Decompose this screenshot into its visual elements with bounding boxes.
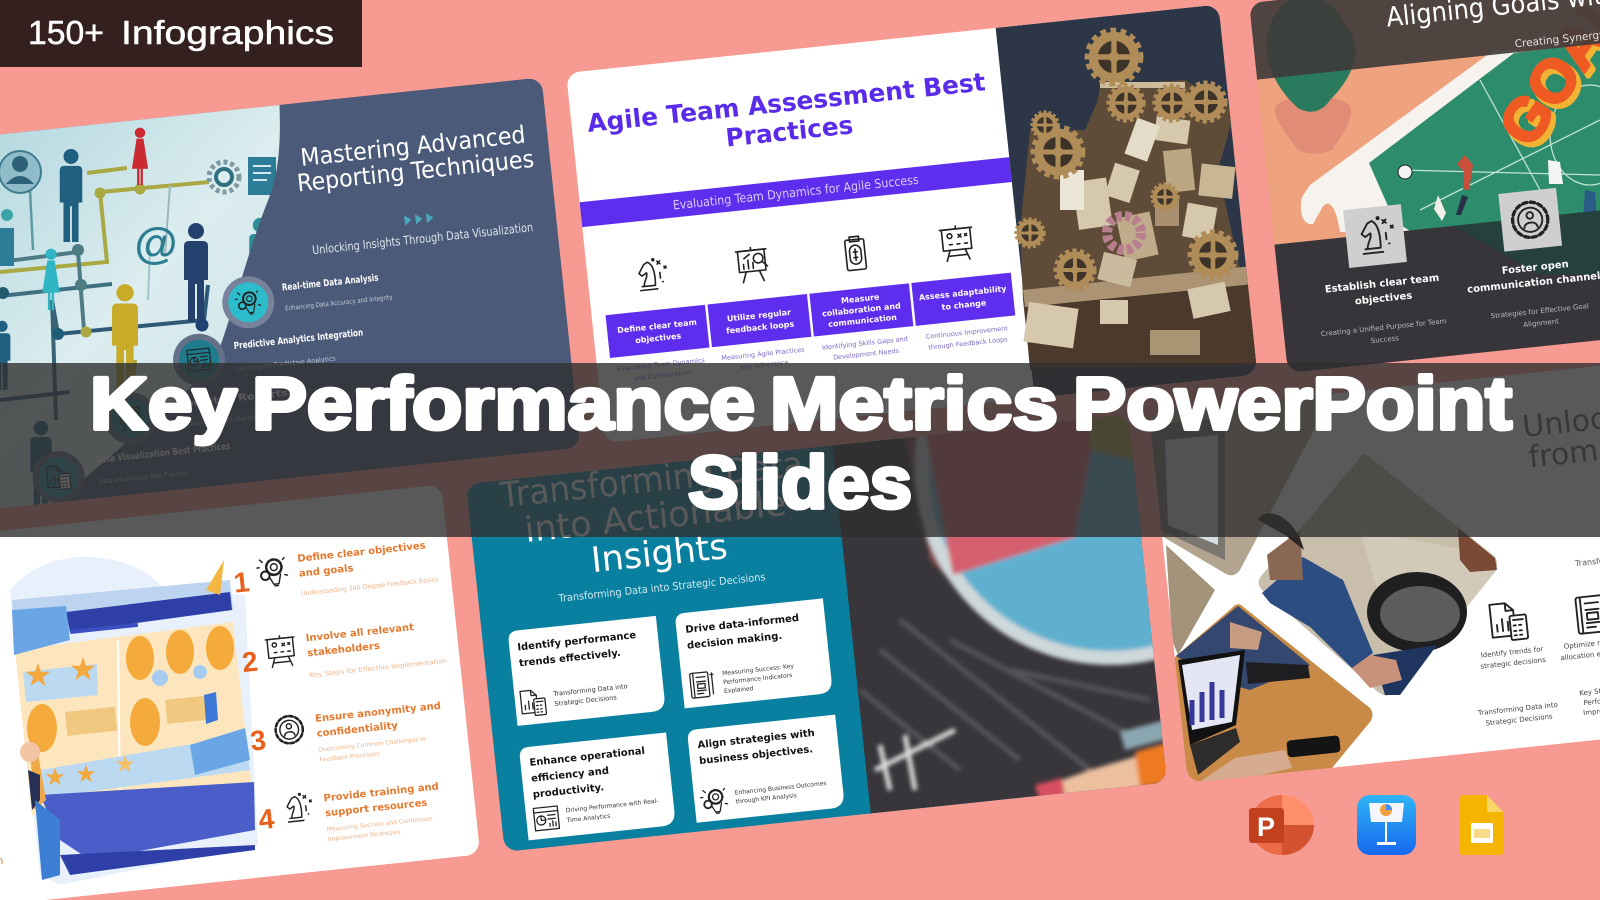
main title xyxy=(90,362,1512,524)
person xyxy=(20,742,60,880)
illustration: feedback screen: ★ xyxy=(114,750,136,778)
seated man shirt xyxy=(1262,557,1373,668)
heading xyxy=(1521,381,1600,476)
title: Transforming Data xyxy=(497,445,805,516)
supporting notes: Continuous Improvement xyxy=(925,324,1009,341)
step 3: 3 xyxy=(249,724,268,757)
card: enhance operational efficiency: productivity. xyxy=(532,782,605,801)
item: data visualization best practices: Data Visualization Best Practices xyxy=(95,441,231,466)
text: establish clear team objectives: Success xyxy=(1370,334,1400,345)
main title: Key xyxy=(90,362,237,445)
item: automated reports xyxy=(108,390,288,444)
icon: gear xyxy=(209,162,239,192)
text: identify trends xyxy=(1471,644,1559,728)
card: align strategies: Align strategies with xyxy=(697,728,815,751)
step 2: Key Steps for Effective Implementation xyxy=(309,657,447,679)
supporting notes: Development Needs xyxy=(833,347,900,362)
supporting notes: Identifying Skills Gaps and xyxy=(822,335,908,352)
card: identify performance trends: Transforming Data into xyxy=(552,682,628,698)
title: into Actionable xyxy=(523,484,788,551)
item: real-time data analysis: Real-time Data Analysis xyxy=(281,273,379,294)
item: predictive analytics integration: Leveraging Predictive Analytics xyxy=(236,354,337,373)
icon tile: communication gear xyxy=(1498,188,1562,252)
card: align strategies xyxy=(687,715,845,823)
card: enhance operational efficiency: Enhance operational xyxy=(529,746,645,769)
text: foster open communication channels: Alignment xyxy=(1523,317,1560,329)
panel: slide Mastering Advanced Reporting Techniques xyxy=(0,78,579,508)
collage: top left piece xyxy=(1150,390,1335,575)
box: measure collaboration and communication xyxy=(809,283,913,337)
title: Insights xyxy=(589,527,730,581)
icon: notebook xyxy=(1575,594,1600,634)
card: drive data-informed decisions: Drive data-informed xyxy=(685,613,800,636)
supporting notes: Measuring Agile Practices xyxy=(721,346,805,362)
box: define clear team objectives xyxy=(606,305,709,358)
illustration: feedback screen: ★ xyxy=(69,650,97,688)
step 2: 2 xyxy=(241,646,259,678)
step 4: Measuring Success and Continuous xyxy=(327,815,433,833)
step 4: Improvement Strategies xyxy=(328,829,401,843)
box: assess adaptability to change: to change xyxy=(941,298,987,312)
box: utilize regular feedback loops xyxy=(707,294,811,347)
badge: 150+ Infographics xyxy=(0,0,362,67)
rolled white paper xyxy=(1301,50,1520,232)
badge: 150+ Infographics: 150+ xyxy=(28,14,104,51)
icon: avatar xyxy=(0,151,41,193)
clasped hands and sleeve xyxy=(1373,645,1437,695)
icon: document and calculator xyxy=(1489,601,1528,642)
collage: laptop and table diamond xyxy=(1172,604,1372,785)
step 1: 1 xyxy=(232,566,251,599)
card: enhance operational efficiency: Time Analytics xyxy=(565,813,611,824)
subtitle: Unlocking Insights Through Data Visualization xyxy=(311,220,534,257)
step 4: 4 xyxy=(257,803,276,835)
step 1: Define clear objectives xyxy=(297,540,426,565)
title xyxy=(298,124,534,194)
text: establish clear team objectives: Creating a Unified Purpose for Team xyxy=(1321,317,1447,338)
plant pot xyxy=(1275,96,1351,154)
icon: arrows xyxy=(404,213,434,225)
title band xyxy=(0,363,1600,537)
main title: Performance xyxy=(252,362,755,445)
card: enhance operational efficiency: efficiency and xyxy=(531,766,610,785)
box: utilize regular feedback loops: Utilize regular xyxy=(726,308,791,323)
item: real-time data analysis: Enhancing Data Accuracy and Integrity xyxy=(285,293,393,312)
card: drive data-informed decisions: Measuring Success: Key xyxy=(722,663,795,677)
card: drive data-informed decisions: decision making. xyxy=(687,631,783,652)
step 2: stakeholders xyxy=(307,641,380,659)
text: foster open communication channels: Strategies for Effective Goal xyxy=(1490,302,1589,320)
photo: gears and papers xyxy=(996,6,1256,398)
step 4 xyxy=(256,779,443,850)
paper and wood pile xyxy=(1020,80,1262,365)
title: Mastering Advanced xyxy=(299,121,527,172)
card: identify performance trends: Strategic Decisions xyxy=(554,693,618,708)
green field xyxy=(1369,40,1600,232)
icon: document xyxy=(248,157,276,195)
card: enhance operational efficiency xyxy=(519,732,676,840)
panel: slide Unlock insights with meeting photo xyxy=(1109,322,1600,821)
box: assess adaptability to change: Assess adaptability xyxy=(919,284,1008,302)
icon: Keynote xyxy=(1357,795,1416,855)
icon: clipboard xyxy=(844,236,867,271)
item: data visualization best practices xyxy=(32,443,230,502)
illustration: feedback screen: ★ xyxy=(24,656,52,694)
card: drive data-informed decisions: Performance Indicators xyxy=(723,672,793,686)
card: drive data-informed decisions: Explained xyxy=(724,685,754,695)
box: define clear team objectives: Define clear team xyxy=(617,318,697,335)
icon: document left xyxy=(0,228,14,266)
illustration: feedback screen xyxy=(10,557,258,885)
icon: at sign: @ xyxy=(135,219,177,268)
bottom dark panel xyxy=(1274,210,1600,372)
title xyxy=(497,445,813,590)
title: Agile Team Assessment Best xyxy=(586,67,987,138)
step 2: Involve all relevant xyxy=(305,622,415,644)
title: Practices xyxy=(724,110,855,153)
step 1 xyxy=(231,539,439,605)
card: align strategies: business objectives. xyxy=(699,744,814,767)
step 3: Ensure anonymity and xyxy=(315,701,441,725)
icon: PowerPoint xyxy=(1249,795,1314,855)
box: define clear team objectives: objectives xyxy=(635,331,682,345)
panel: slide Agile Team Assessment Best Practices xyxy=(566,0,1301,451)
plant leaves xyxy=(1266,0,1356,112)
badge: 150+ Infographics: Infographics xyxy=(121,14,334,51)
box: measure collaboration and communication: Measure xyxy=(841,292,880,305)
card: identify performance trends: trends effectively. xyxy=(519,648,621,669)
step 3: confidentiality xyxy=(316,720,399,740)
supporting notes: Evaluating Team Dynamics xyxy=(617,356,706,373)
illustration: football field and plant xyxy=(1266,0,1600,232)
main title: Metrics xyxy=(770,362,1058,445)
text: identify trends: strategic decisions xyxy=(1480,656,1547,671)
box: measure collaboration and communication: communication xyxy=(828,313,898,329)
purple subtitle band: Evaluating Team Dynamics for Agile Success xyxy=(672,172,919,213)
main title: PowerPoint xyxy=(1073,362,1512,445)
icon: strategy board xyxy=(939,224,975,262)
text: foster open communication channels xyxy=(1465,255,1600,335)
step 4: support resources xyxy=(325,798,428,819)
icon: Google Slides xyxy=(1460,795,1503,855)
players xyxy=(1398,155,1597,222)
supporting notes: and Adherence xyxy=(739,358,789,371)
supporting notes: through Feedback Loops xyxy=(928,335,1009,352)
icon: PowerPoint: P xyxy=(1257,812,1275,842)
step 1: Understanding 360-Degree Feedback Basics xyxy=(301,575,439,598)
card: align strategies: Enhancing Business Outcomes xyxy=(734,780,827,797)
item: automated reports: Automated Reports xyxy=(163,388,289,412)
panel: slide Transforming Data into Actionable Insights xyxy=(449,236,1353,891)
second man head xyxy=(1458,528,1497,572)
purple subtitle band xyxy=(580,157,1012,227)
card: identify performance trends: Identify performance xyxy=(517,630,637,653)
item: automated reports: Streamlining Report Generation xyxy=(165,411,274,431)
text: establish clear team objectives: objectives xyxy=(1354,291,1413,308)
subtitle: Transforming Data into Strategic Decisions xyxy=(557,571,766,605)
illustration: feedback screen: ★ xyxy=(75,760,97,788)
box: assess adaptability to change xyxy=(911,273,1015,326)
illustration: feedback screen: ★ xyxy=(44,763,66,791)
card: identify performance trends xyxy=(508,616,666,726)
step 1: and goals xyxy=(298,563,354,580)
box: utilize regular feedback loops: feedback loops xyxy=(726,320,795,336)
bottom teal shade xyxy=(1454,210,1600,274)
text: identify trends: Transforming Data into xyxy=(1477,701,1558,717)
main title: Slides xyxy=(688,441,912,524)
panel: slide Aligning Goals xyxy=(1237,0,1600,380)
item: data visualization best practices: Data Visualization Best Practices xyxy=(99,468,190,486)
supporting notes xyxy=(617,324,1010,384)
collage: central meeting diamond xyxy=(1258,454,1497,696)
card: align strategies: through KPI Analysis xyxy=(735,792,797,806)
title: Reporting Techniques xyxy=(296,145,535,197)
item: predictive analytics integration: Predictive Analytics Integration xyxy=(233,327,364,352)
card: enhance operational efficiency: Driving Performance with Real- xyxy=(565,798,659,814)
card: drive data-informed decisions xyxy=(675,598,833,708)
text: establish clear team objectives xyxy=(1316,272,1448,350)
box: measure collaboration and communication: collaboration and xyxy=(822,301,901,319)
text: foster open communication channels: Foster open xyxy=(1501,259,1569,277)
step 4: Provide training and xyxy=(323,781,439,804)
step 3 xyxy=(248,700,445,771)
step 3: Overcoming Common Challenges in xyxy=(318,735,426,754)
item: real-time data analysis xyxy=(222,274,392,328)
panel: slide Define clear objectives xyxy=(0,484,481,900)
top dark panel xyxy=(1249,0,1600,80)
text: optimize allocation xyxy=(1559,636,1600,719)
text: identify trends: Identify trends for xyxy=(1480,645,1544,660)
supporting notes: and Collaboration xyxy=(633,369,691,383)
photo: chalk pie chart xyxy=(805,236,1353,854)
item: predictive analytics integration xyxy=(173,329,363,385)
slate text panel xyxy=(68,78,579,502)
icon: chess knight xyxy=(638,258,668,291)
icon tile: chess knight xyxy=(1343,204,1407,268)
icon: presentation chart xyxy=(735,246,769,283)
office chair xyxy=(1367,572,1467,652)
text: establish clear team objectives: Establish clear team xyxy=(1324,273,1440,296)
step 3: Feedback Processes xyxy=(319,750,380,764)
illustration: people network xyxy=(0,102,306,508)
step 2 xyxy=(240,619,447,686)
photo collage xyxy=(1150,390,1497,785)
collage: left wedge xyxy=(1166,545,1215,655)
text: identify trends: Strategic Decisions xyxy=(1485,712,1553,727)
